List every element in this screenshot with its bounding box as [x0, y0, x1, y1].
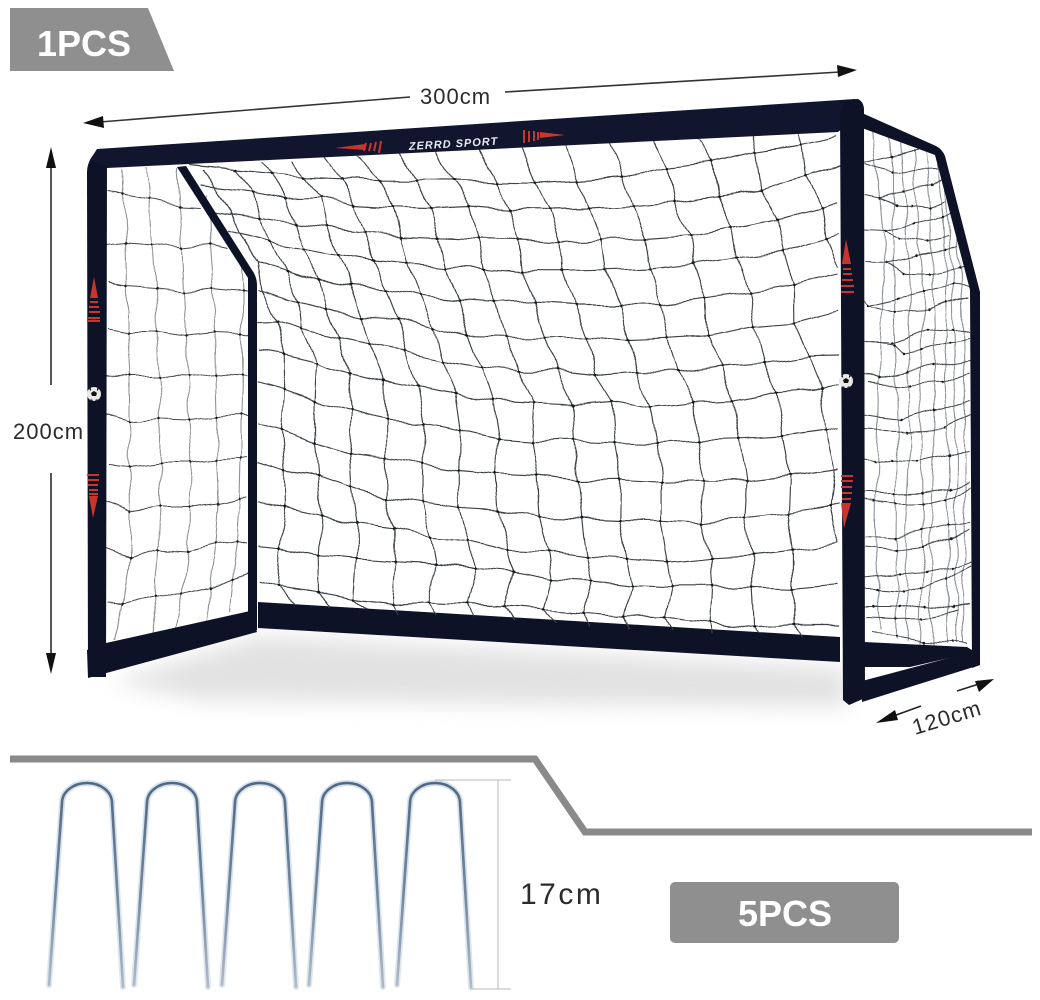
dimension: 17cm stake length: 17cm	[520, 878, 603, 911]
frame: right ground bar	[862, 651, 980, 702]
dimension: 200cm height: 200cm	[13, 419, 84, 444]
badge: 1PCS: 1PCS	[37, 23, 131, 64]
crossbar red arrow right	[524, 130, 565, 143]
frame: right post	[840, 99, 865, 705]
stake 5	[397, 783, 471, 987]
stake 3	[222, 783, 296, 987]
dimension: 300cm width	[83, 65, 857, 128]
badge: 5PCS	[670, 882, 899, 943]
frame: left diagonal and inner post	[177, 166, 257, 630]
stake 2	[134, 783, 208, 987]
right post red arrow top	[841, 239, 854, 292]
crossbar text: ZERRD SPORT: ZERRD SPORT	[407, 136, 499, 153]
dimension: 120cm depth	[876, 679, 994, 740]
net: main back panel	[190, 130, 839, 637]
football icon left	[87, 387, 101, 401]
frame: left ground bar	[87, 611, 257, 678]
dimension: 200cm height	[13, 147, 84, 674]
stake 4	[309, 783, 383, 987]
ground shadow	[110, 636, 850, 706]
right post red arrow bottom	[841, 476, 853, 528]
ground stakes: 5 pieces	[49, 783, 471, 987]
frame: crossbar	[90, 99, 864, 168]
left post red arrow bottom	[87, 475, 99, 518]
dimension: 120cm depth: 120cm	[909, 695, 984, 740]
net: right side panel	[863, 130, 970, 645]
frame: left post	[87, 150, 107, 677]
goal frame	[87, 99, 980, 705]
crossbar red arrow left	[335, 141, 381, 153]
left post red arrow top	[88, 277, 100, 321]
badge: 1PCS	[10, 8, 174, 71]
badge: 5PCS: 5PCS	[738, 893, 832, 934]
rear ground bars	[258, 602, 975, 667]
frame: right side top and rear post	[862, 113, 980, 668]
net: left side panel	[107, 168, 250, 640]
dimension: 300cm width: 300cm	[420, 84, 491, 109]
dimension: 17cm stake length	[435, 780, 603, 989]
separator line	[10, 759, 1032, 832]
football icon right	[839, 374, 853, 388]
stake 1	[49, 783, 123, 987]
